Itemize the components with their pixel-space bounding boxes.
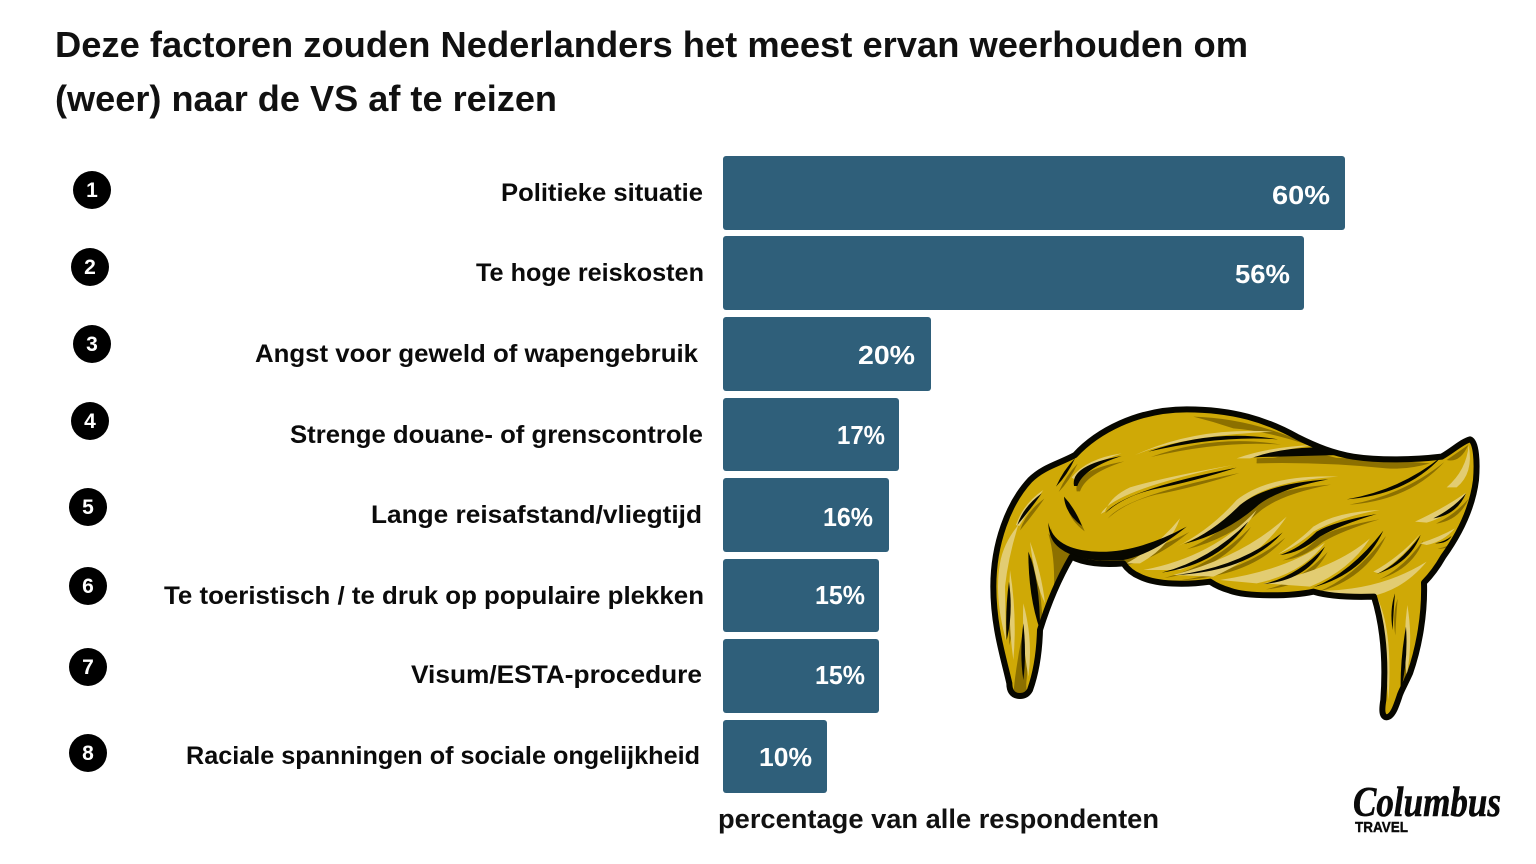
logo: Columbus Travel: Columbus [1353, 780, 1501, 826]
rank numbers [69, 171, 111, 772]
label 2: Te hoge reiskosten [476, 259, 704, 287]
rank 5: 5 [82, 496, 94, 519]
rank 1 [73, 171, 111, 209]
label 6: Te toeristisch / te druk op populaire plekken [164, 582, 704, 610]
label 7: Visum/ESTA-procedure [411, 661, 702, 689]
rank 6: 6 [82, 575, 94, 598]
bar 15% row 6: 15% [815, 580, 865, 610]
label 5: Lange reisafstand/vliegtijd [371, 501, 702, 529]
bar 15% row 7 [723, 639, 879, 713]
rank 5 [69, 488, 107, 526]
bar 16%: 16% [823, 502, 873, 532]
axis caption: percentage van alle respondenten [718, 804, 1159, 834]
bar 17%: 17% [837, 420, 885, 450]
bar 56% [723, 236, 1304, 310]
label 1: Politieke situatie [501, 179, 703, 207]
title [55, 24, 1248, 119]
bar 60%: 60% [1272, 180, 1330, 210]
label 3: Angst voor geweld of wapengebruik [255, 340, 698, 368]
logo: Columbus Travel: TRAVEL [1355, 819, 1408, 836]
title: Deze factoren zouden Nederlanders het meest ervan weerhouden om [55, 24, 1248, 65]
rank 8 [69, 734, 107, 772]
bar 16% [723, 478, 889, 552]
rank 1: 1 [86, 179, 98, 202]
category labels [164, 179, 704, 770]
title: (weer) naar de VS af te reizen [55, 78, 557, 119]
rank 3: 3 [86, 333, 98, 356]
rank 4: 4 [84, 410, 96, 433]
rank 2 [71, 248, 109, 286]
bar 20%: 20% [858, 340, 915, 370]
rank 6 [69, 567, 107, 605]
rank 8: 8 [82, 742, 94, 765]
rank 2: 2 [84, 256, 96, 279]
rank 7 [69, 648, 107, 686]
bar 17% [723, 398, 899, 471]
bar 10% [723, 720, 827, 793]
bar 60% [723, 156, 1345, 230]
label 4: Strenge douane- of grenscontrole [290, 421, 703, 449]
bar chart [723, 156, 1345, 793]
rank 4 [71, 402, 109, 440]
bar 56%: 56% [1235, 259, 1290, 289]
label 8: Raciale spanningen of sociale ongelijkheid [186, 742, 700, 770]
bar 10%: 10% [759, 742, 812, 772]
bar 15% row 7: 15% [815, 660, 865, 690]
rank 3 [73, 325, 111, 363]
bar 15% row 6 [723, 559, 879, 632]
illustration: blond hair wig [993, 409, 1477, 717]
bar 20% [723, 317, 931, 391]
rank 7: 7 [82, 656, 94, 679]
